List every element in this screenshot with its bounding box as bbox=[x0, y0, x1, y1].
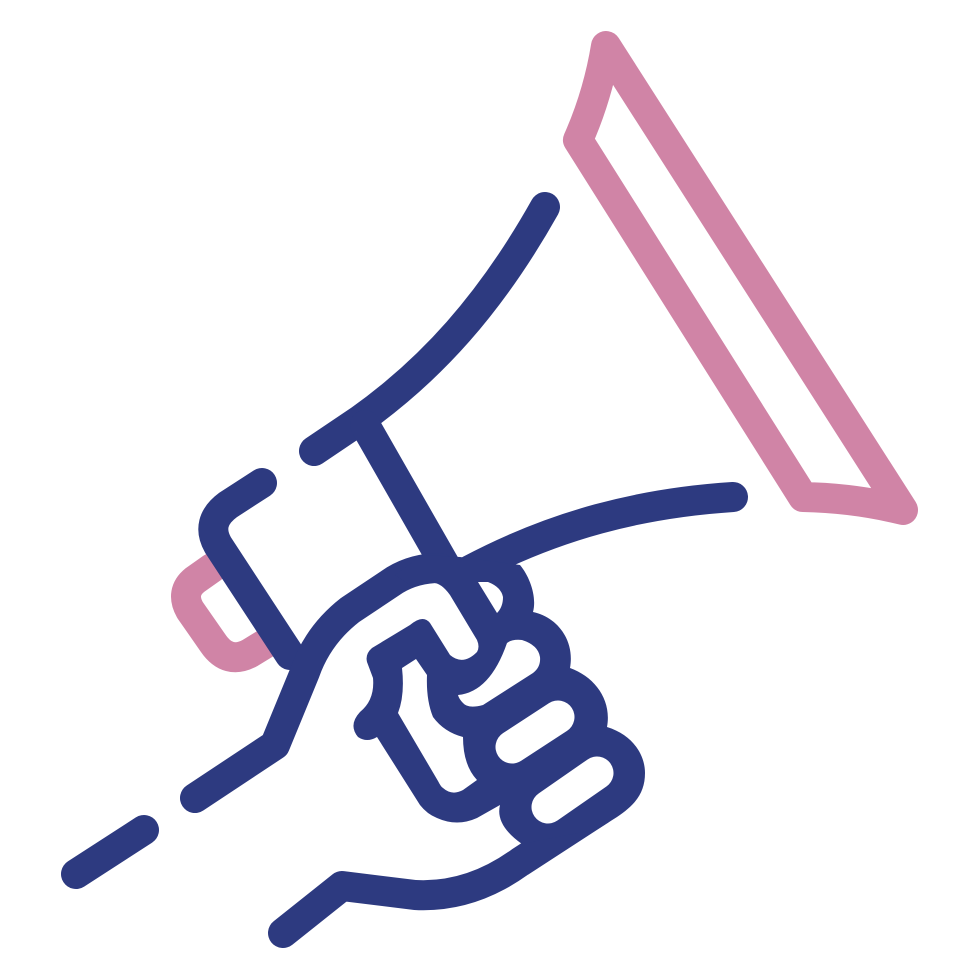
icon: wrist and upper hand outline bbox=[195, 568, 440, 798]
icon: motion dash bbox=[76, 830, 144, 874]
icon: megaphone body bbox=[213, 207, 733, 655]
icon: lower hand outline bbox=[283, 810, 600, 933]
icon: second finger gap bbox=[458, 640, 540, 707]
icon: gap above first finger bbox=[478, 582, 503, 613]
icon: palm opening bbox=[398, 659, 477, 793]
icon: fist silhouette bbox=[353, 555, 645, 844]
icon: megaphone rear cap bbox=[186, 568, 268, 657]
icon: third finger gap bbox=[512, 717, 558, 747]
icon: hand and fist bbox=[195, 555, 645, 933]
icon: megaphone horn rim bbox=[578, 46, 903, 510]
icon: fourth finger gap bbox=[548, 773, 597, 807]
